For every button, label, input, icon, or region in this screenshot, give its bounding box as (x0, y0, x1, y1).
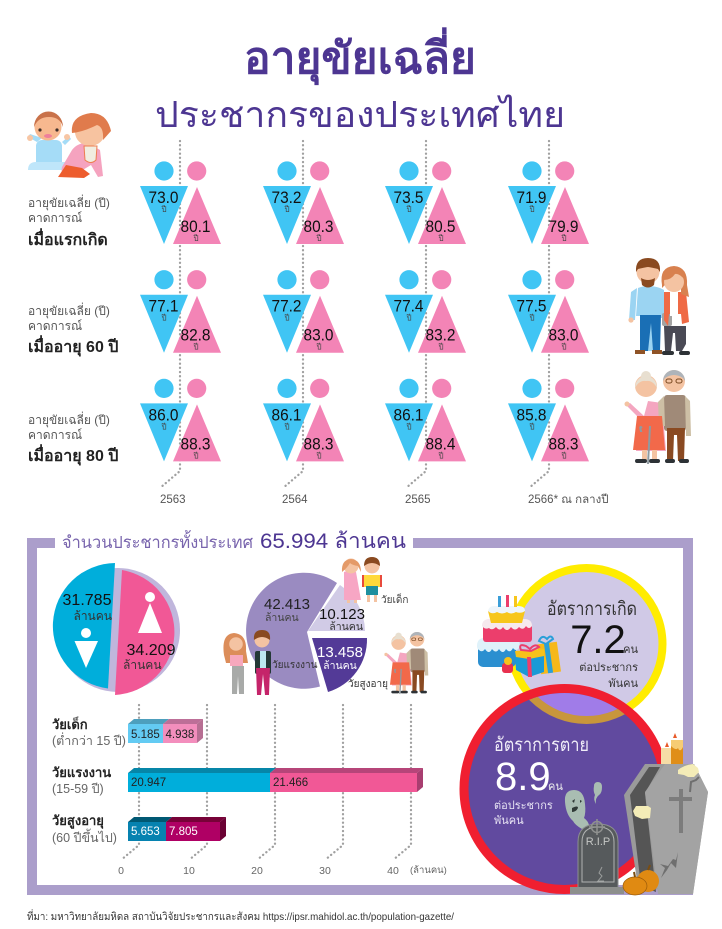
life expectancy 2565 age 80: 88.4 (426, 434, 456, 453)
life expectancy 2563 birth: ปี (161, 205, 167, 214)
year guide lines (160, 141, 549, 488)
death rate circle: คน (548, 781, 563, 793)
bar labels: (60 ปีขึ้นไป) (52, 828, 117, 845)
row label: at birth (28, 194, 110, 249)
life expectancy 2565 age 60: ปี (406, 314, 412, 323)
life expectancy 2565 age 60: ปี (438, 343, 444, 352)
life expectancy 2563 age 80: 86.0 (148, 405, 178, 424)
birth rate circle: ต่อประชากร (579, 662, 638, 674)
bar: elderly (128, 817, 226, 841)
bar labels: วัยเด็ก (52, 715, 88, 732)
life expectancy 2565 birth (385, 161, 466, 244)
row label: at age 80: เมื่ออายุ 80 ปี (28, 444, 118, 466)
life expectancy 2566 age 80: 85.8 (516, 405, 546, 424)
panel frame: population (32, 543, 688, 890)
row label: at age 60 (28, 302, 118, 357)
life expectancy 2566 age 60: 83.0 (548, 326, 578, 345)
life expectancy 2566 age 80: ปี (529, 422, 535, 431)
bar: working age: 21.466 (273, 777, 308, 789)
birth rate circle: 7.2 (570, 618, 626, 662)
death rate circle (460, 684, 662, 894)
female value: 34.209 (127, 642, 176, 659)
life expectancy 2563 age 60: 77.1 (148, 297, 178, 316)
axis labels: 20 (251, 865, 263, 877)
life expectancy 2564 birth (263, 161, 344, 244)
life expectancy 2564 age 60: ปี (284, 314, 290, 323)
icon: tombstone (570, 819, 624, 894)
life expectancy 2564 age 80 (263, 379, 344, 461)
life expectancy 2563 age 80: ปี (193, 451, 199, 460)
age pie chart: 13.458 (317, 644, 363, 661)
female value (123, 642, 176, 672)
life expectancy 2566 age 80: 88.3 (548, 434, 578, 453)
life expectancy 2564 age 60: 83.0 (304, 326, 334, 345)
icon: babies (27, 111, 111, 178)
age pie chart (246, 573, 408, 692)
life expectancy 2566 birth (508, 161, 589, 244)
icon: pumpkins (623, 865, 659, 895)
life expectancy 2565 age 80: 86.1 (394, 405, 424, 424)
icon: tombstone: R.I.P (586, 836, 610, 848)
life expectancy 2566 age 60: 77.5 (516, 297, 546, 316)
life expectancy 2563 age 80: 88.3 (180, 434, 210, 453)
birth rate circle: คน (623, 644, 638, 656)
icon: female symbol (138, 592, 162, 633)
age pie chart: ล้านคน (323, 660, 357, 672)
population heading (62, 530, 406, 553)
bar: children: 5.185 (131, 729, 160, 741)
life expectancy 2566 birth: 71.9 (516, 188, 546, 207)
icon: cake and gifts (477, 595, 561, 677)
row label: at age 80 (28, 411, 118, 466)
age pie chart: ล้านคน (329, 621, 363, 633)
life expectancy 2563 age 80: ปี (161, 422, 167, 431)
bar: elderly: 7.805 (169, 826, 198, 838)
male value (63, 592, 112, 623)
life expectancy 2563 age 60: ปี (193, 343, 199, 352)
icon: small elderly couple (384, 632, 428, 694)
bar: elderly: 5.653 (131, 826, 160, 838)
birth rate circle (510, 568, 662, 720)
life expectancy 2566 birth: ปี (561, 234, 567, 243)
female value: ล้านคน (123, 658, 162, 672)
bar: children: 4.938 (166, 729, 194, 741)
bar: working age: 20.947 (131, 777, 166, 789)
gender pie chart (53, 563, 180, 695)
male value: ล้านคน (73, 609, 112, 623)
bar labels: วัยสูงอายุ (52, 813, 104, 829)
life expectancy 2565 age 80: ปี (406, 422, 412, 431)
bar chart grid (121, 705, 411, 860)
life expectancy 2565 age 80 (385, 379, 466, 461)
life expectancy 2565 age 60: 83.2 (426, 326, 456, 345)
icon: coffin (624, 764, 708, 894)
life expectancy 2564 age 60 (263, 270, 344, 353)
row label: at age 60: เมื่ออายุ 60 ปี (28, 335, 118, 357)
death rate circle: ต่อประชากร (494, 800, 553, 812)
row label: at age 60: อายุขัยเฉลี่ย (ปี) (28, 302, 110, 319)
life expectancy 2565 age 60 (385, 270, 466, 353)
life expectancy 2563 birth (140, 161, 221, 244)
age pie chart: 42.413 (264, 596, 310, 613)
age pie chart: 10.123 (319, 606, 365, 623)
bar: working age (128, 768, 423, 792)
life expectancy 2563 birth: 80.1 (180, 217, 210, 236)
life expectancy 2564 birth: 73.2 (272, 188, 302, 207)
life expectancy 2563 birth: 73.0 (148, 188, 178, 207)
birth rate circle: อัตราการเกิด (547, 599, 637, 620)
life expectancy 2565 birth: 80.5 (426, 217, 456, 236)
population heading: 65.994 ล้านคน (260, 530, 406, 553)
icon: candles (661, 733, 683, 764)
life expectancy 2564 age 60: ปี (316, 343, 322, 352)
life expectancy 2563 birth: ปี (193, 234, 199, 243)
year labels: 2566* ณ กลางปี (528, 493, 608, 506)
axis labels (118, 865, 447, 877)
year labels: 2565 (405, 494, 431, 506)
life expectancy 2566 age 60: ปี (561, 343, 567, 352)
title: อายุขัยเฉลี่ย (244, 27, 476, 86)
row label: at age 80: คาดการณ์ (28, 428, 82, 442)
life expectancy 2564 birth: ปี (284, 205, 290, 214)
life expectancy 2564 age 80: 88.3 (304, 434, 334, 453)
icon: adult couple (628, 258, 690, 355)
age pie chart: วัยสูงอายุ (348, 679, 388, 690)
icon: children (342, 557, 382, 603)
year labels: 2564 (282, 494, 308, 506)
life expectancy 2563 age 60: 82.8 (180, 326, 210, 345)
axis labels: 30 (319, 865, 331, 877)
death rate circle: อัตราการตาย (494, 735, 589, 756)
life expectancy 2565 birth: 73.5 (394, 188, 424, 207)
bar labels (52, 715, 126, 845)
life expectancy 2563 age 60: ปี (161, 314, 167, 323)
bar labels: (15-59 ปี) (52, 782, 104, 796)
population heading: จำนวนประชากรทั้งประเทศ (62, 530, 253, 552)
life expectancy 2564 age 80: ปี (284, 422, 290, 431)
icon: working-age couple (223, 630, 271, 695)
subtitle: ประชากรของประเทศไทย (155, 94, 565, 135)
life expectancy 2565 age 60: 77.4 (394, 297, 424, 316)
bar: children (128, 719, 203, 743)
row label: at birth: คาดการณ์ (28, 211, 82, 225)
life expectancy 2565 birth: ปี (438, 234, 444, 243)
year labels (160, 493, 608, 506)
life expectancy 2566 age 60 (508, 270, 589, 353)
axis labels: 10 (183, 865, 195, 877)
icon: male symbol (74, 628, 98, 668)
life expectancy 2566 age 80 (508, 379, 589, 461)
life expectancy 2566 birth: ปี (529, 205, 535, 214)
icon: ghosts (565, 782, 602, 837)
axis labels: 0 (118, 865, 124, 877)
male value: 31.785 (63, 592, 112, 609)
life expectancy 2563 age 80 (140, 379, 221, 461)
axis labels: 40 (387, 865, 399, 877)
row label: at age 60: คาดการณ์ (28, 319, 82, 333)
age pie chart: วัยแรงงาน (272, 660, 318, 671)
life expectancy 2565 birth: ปี (406, 205, 412, 214)
row label: at birth: อายุขัยเฉลี่ย (ปี) (28, 194, 110, 211)
life expectancy 2564 age 80: ปี (316, 451, 322, 460)
life expectancy 2563 age 60 (140, 270, 221, 353)
life expectancy 2564 age 60: 77.2 (272, 297, 302, 316)
age pie chart: วัยเด็ก (381, 592, 408, 606)
age pie chart: ล้านคน (265, 612, 299, 624)
bar labels: (ต่ำกว่า 15 ปี) (52, 732, 126, 748)
life expectancy 2566 age 80: ปี (561, 451, 567, 460)
birth rate circle: พันคน (608, 678, 638, 690)
row label: at birth: เมื่อแรกเกิด (28, 228, 108, 249)
source: ที่มา: มหาวิทยาลัยมหิดล สถาบันวิจัยประชากรและสังคม https://ipsr.mahidol.ac.th/population-gazette/ (27, 909, 454, 923)
life expectancy 2564 birth: 80.3 (304, 217, 334, 236)
year labels: 2563 (160, 494, 186, 506)
life expectancy 2565 age 80: ปี (438, 451, 444, 460)
life expectancy 2566 age 60: ปี (529, 314, 535, 323)
life expectancy 2566 birth: 79.9 (548, 217, 578, 236)
axis labels: (ล้านคน) (410, 865, 447, 876)
icon: elderly couple (624, 370, 691, 464)
death rate circle: พันคน (494, 815, 524, 827)
life expectancy 2564 birth: ปี (316, 234, 322, 243)
bar labels: วัยแรงงาน (52, 765, 111, 780)
row label: at age 80: อายุขัยเฉลี่ย (ปี) (28, 411, 110, 428)
life expectancy 2564 age 80: 86.1 (272, 405, 302, 424)
death rate circle: 8.9 (495, 755, 551, 799)
